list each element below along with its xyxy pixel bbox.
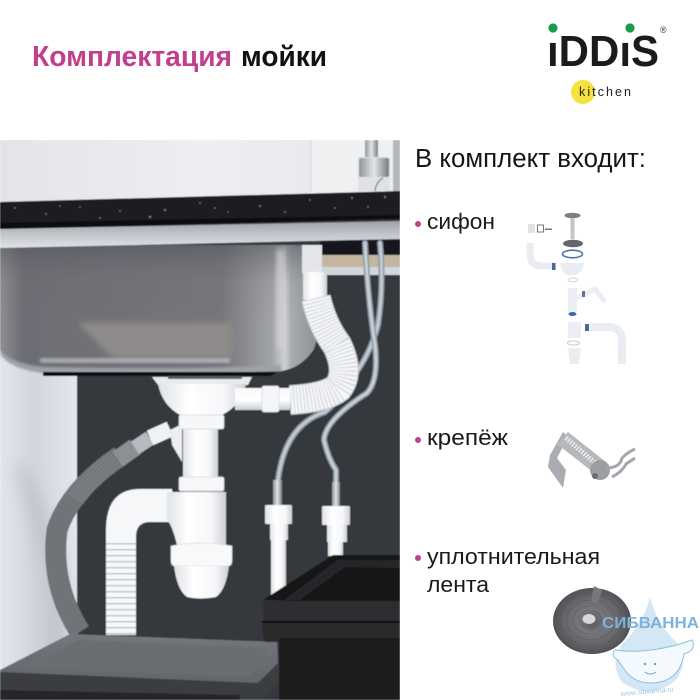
item: sealing tape: лента <box>427 572 490 597</box>
outlet elbow <box>106 489 176 548</box>
item: sealing tape <box>415 544 600 597</box>
title: Комплектация <box>32 41 232 73</box>
sink bowl <box>0 245 316 376</box>
icon: roll of sealing tape <box>553 586 631 654</box>
logo: IDDIS kitchen: kitchen <box>579 85 631 99</box>
soft shadow on left wall <box>15 468 69 648</box>
corrugated drain hose <box>290 245 344 400</box>
watermark: Sibvanna: СИБВАННА <box>602 615 699 632</box>
icon: exploded siphon parts <box>528 213 622 364</box>
photo: sink with siphon installed <box>0 140 400 700</box>
logo: IDDIS kitchen: ıDDıS <box>547 27 659 76</box>
item: siphon: сифон <box>427 209 495 234</box>
item: fasteners: крепёж <box>427 425 508 450</box>
faucet base <box>358 140 400 192</box>
item: sealing tape: уплотнительная <box>427 544 600 569</box>
water hoses <box>278 243 382 482</box>
left wall <box>0 340 77 700</box>
title <box>32 41 327 73</box>
water connectors <box>265 480 350 596</box>
grey bin <box>0 634 279 700</box>
watermark: Sibvanna: www.sibvanna.ru <box>620 686 674 698</box>
area behind sink: wood strip and dark gap <box>320 240 400 275</box>
logo: IDDIS kitchen: ® <box>660 25 667 35</box>
logo: IDDIS kitchen <box>547 23 667 104</box>
watermark: Sibvanna <box>602 597 699 698</box>
countertop <box>0 191 400 229</box>
siphon trap <box>106 415 232 635</box>
heading: what is included: В комплект входит: <box>415 145 646 173</box>
icon: metal clip <box>548 432 635 488</box>
corrugated outlet pipe <box>106 543 136 635</box>
black bin <box>262 555 400 700</box>
grey washing machine hose <box>56 429 170 632</box>
drain funnel and flange <box>152 376 290 415</box>
title: мойки <box>241 41 327 73</box>
wall above countertop <box>0 140 400 205</box>
sink rim <box>0 221 400 248</box>
